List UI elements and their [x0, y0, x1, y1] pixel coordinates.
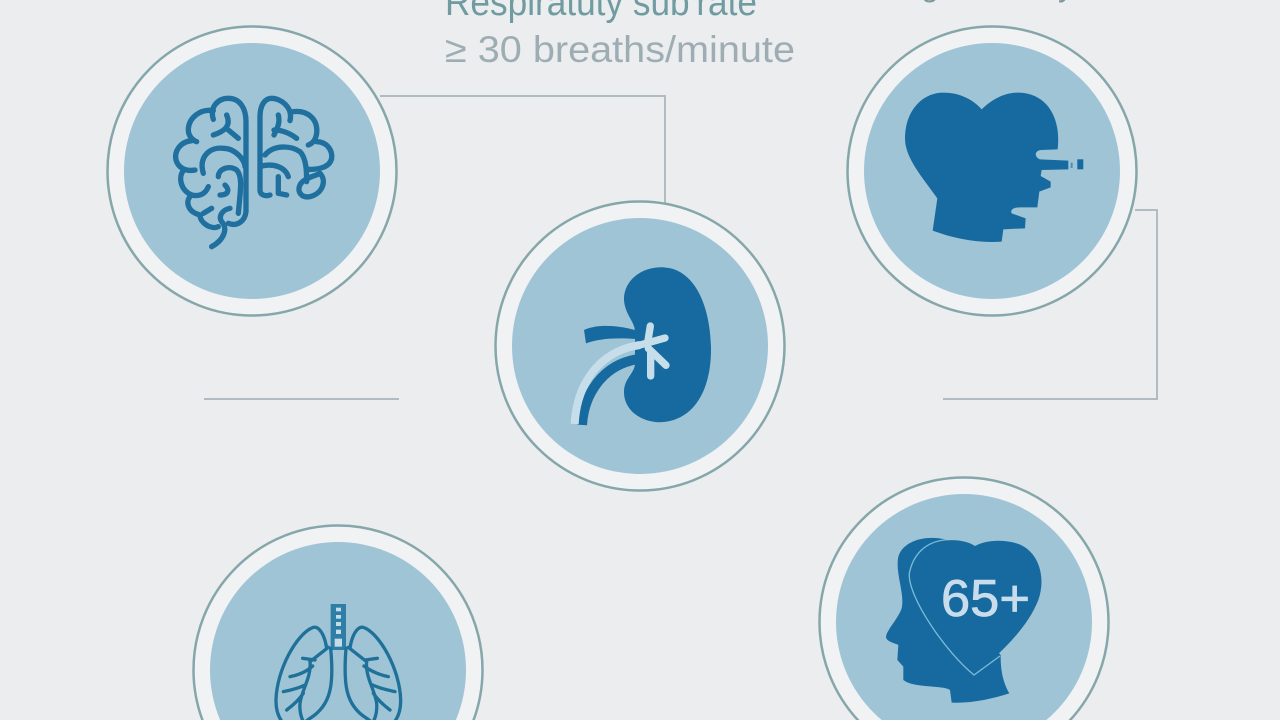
panel: age 65+	[820, 478, 1108, 720]
icon: kidney	[575, 267, 711, 425]
icon: lungs	[276, 604, 401, 720]
panel: lungs	[194, 526, 482, 720]
icon: heart-shaped head with breath line	[905, 93, 1083, 242]
connector: left rule	[204, 398, 399, 400]
icon: head and heart	[886, 538, 1041, 703]
heading: respiratory rate criterion	[445, 0, 795, 70]
panel: heart and head	[848, 26, 1136, 316]
icon: brain	[176, 98, 332, 247]
connector: heart to right rule	[943, 210, 1157, 399]
panel: brain	[108, 26, 396, 316]
panel: kidney	[496, 202, 784, 490]
label: 65+: 65+	[941, 570, 1030, 628]
connector: brain to kidney	[380, 96, 665, 205]
heading: respiratory rate criterion: ≥ 30 breaths/minute	[445, 29, 795, 70]
